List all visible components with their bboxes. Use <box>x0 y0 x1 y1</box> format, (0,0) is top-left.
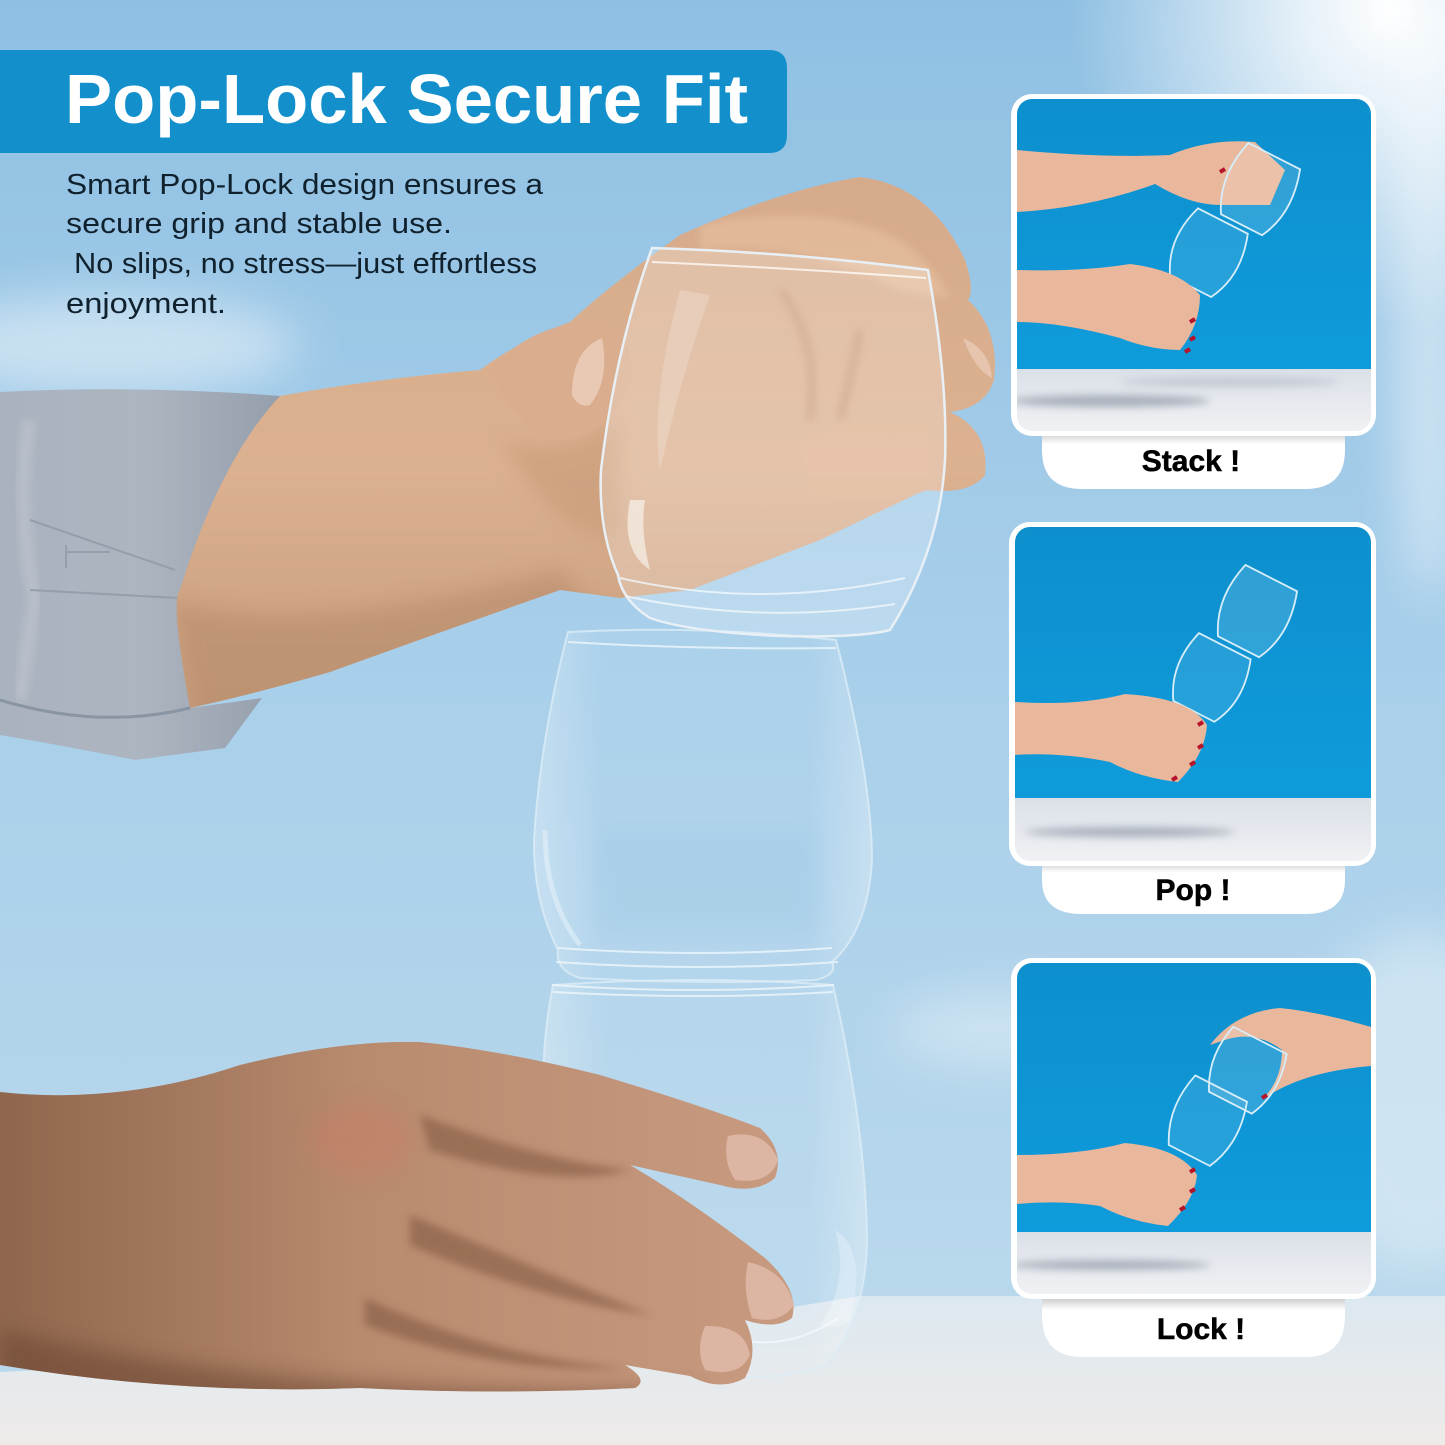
lower hand <box>0 1042 794 1392</box>
table surface <box>0 1296 1445 1445</box>
body text: No slips, no stress—just effortless <box>74 248 537 280</box>
header banner <box>0 50 787 153</box>
label tab: Stack: Stack ! <box>1142 445 1240 478</box>
lower glass <box>543 980 867 1377</box>
label tab: Lock <box>1042 1290 1345 1357</box>
panel: Pop <box>1009 522 1376 914</box>
label tab: Lock: Lock ! <box>1157 1313 1245 1346</box>
body text: secure grip and stable use. <box>66 208 452 240</box>
sleeve <box>0 389 280 760</box>
title: Pop-Lock Secure Fit <box>65 60 748 138</box>
label tab: Pop: Pop ! <box>1156 874 1230 907</box>
middle glass <box>534 630 872 990</box>
panel: Stack <box>1010 94 1376 489</box>
top glass <box>601 248 945 636</box>
body text: Smart Pop-Lock design ensures a <box>66 169 544 201</box>
label tab: Pop <box>1042 855 1345 914</box>
panel: Lock <box>1010 958 1376 1357</box>
label tab: Stack <box>1042 425 1345 489</box>
body text: enjoyment. <box>66 288 226 320</box>
upper arm and hand <box>170 177 995 730</box>
body text <box>66 169 544 320</box>
